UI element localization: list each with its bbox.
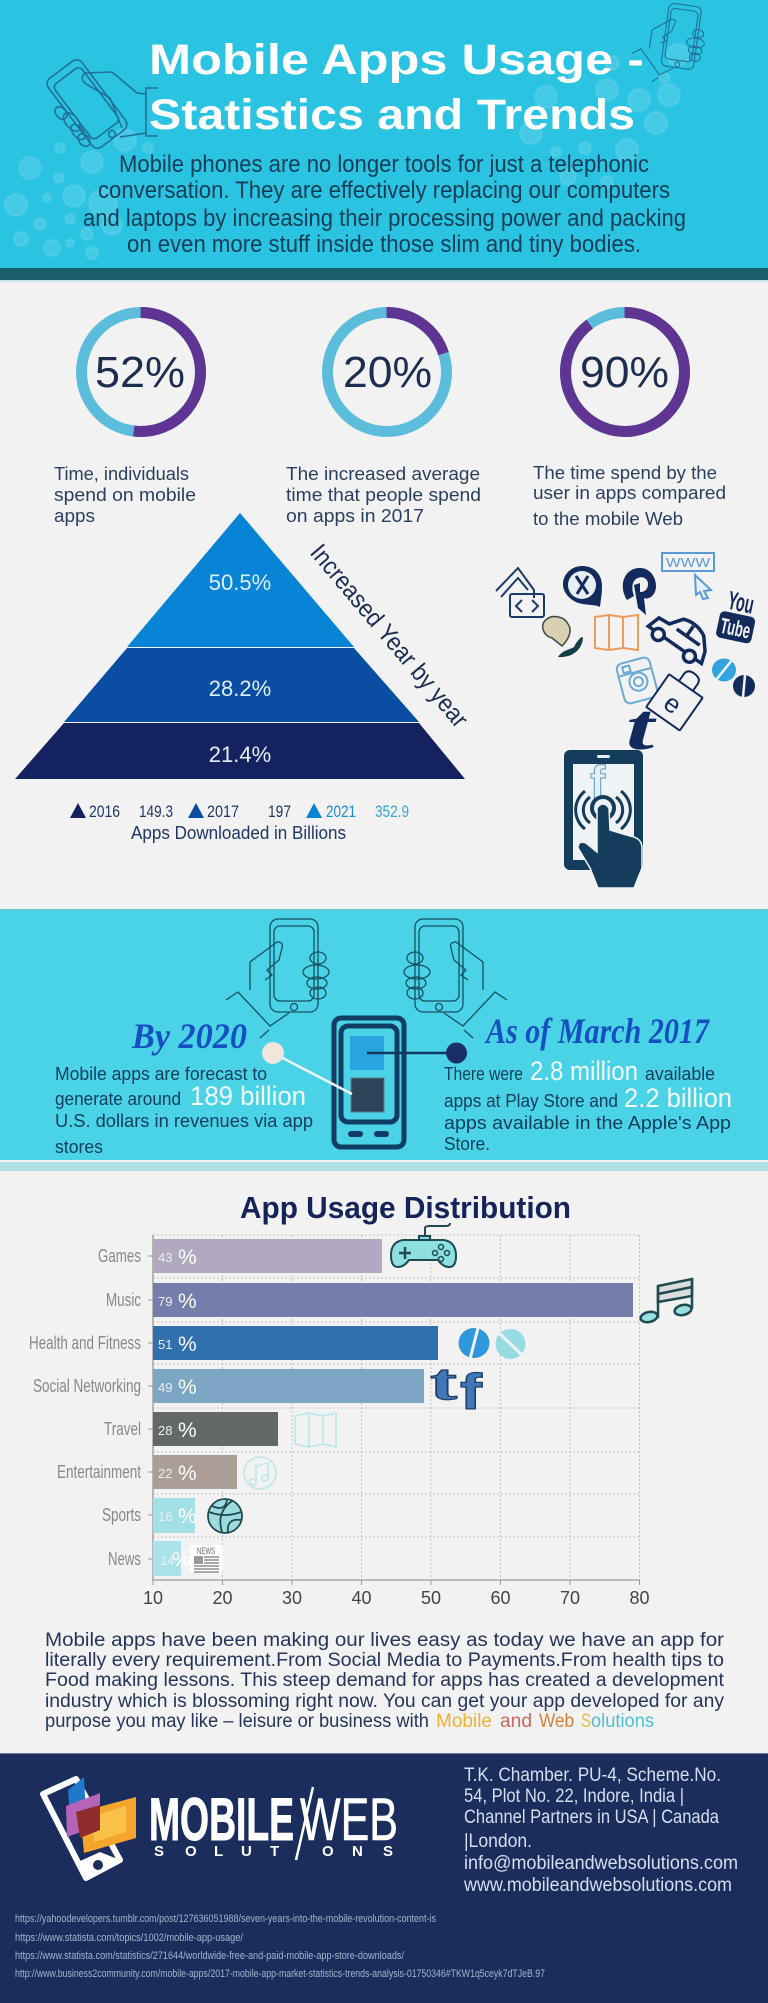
icon: e-shopping bag: e bbox=[658, 687, 687, 720]
heading: by 2020: By 2020 bbox=[131, 1016, 247, 1056]
text block: closing paragraph: S bbox=[581, 1711, 591, 1732]
icon: music notes bbox=[640, 1279, 692, 1324]
icon: chef hat and moustache bbox=[543, 617, 583, 657]
text: revenue forecast: 189 billion bbox=[190, 1081, 306, 1111]
icon: blue pill bbox=[712, 658, 736, 682]
text block: closing paragraph: Food making lessons. This steep demand for apps has created a development bbox=[45, 1670, 725, 1691]
bar: travel: 28 bbox=[158, 1423, 172, 1438]
icon: restaurant pin bbox=[563, 566, 602, 607]
icon: newspaper: NEWS bbox=[197, 1546, 215, 1556]
logo: mobile and web solutions: SOLUTONS bbox=[154, 1843, 393, 1860]
text: app store counts: Store. bbox=[444, 1134, 490, 1154]
bar: news: 14 bbox=[160, 1553, 174, 1568]
text block: closing paragraph bbox=[45, 1630, 725, 1732]
intro text: Mobile phones are no longer tools for just a telephonic bbox=[119, 151, 649, 178]
text block: closing paragraph: olutions bbox=[591, 1711, 654, 1732]
bar: news: % bbox=[172, 1548, 191, 1571]
x axis labels: 80 bbox=[629, 1588, 650, 1608]
icon: map bbox=[595, 615, 638, 650]
icon: music circle bbox=[244, 1457, 276, 1489]
icon: basketball bbox=[208, 1499, 242, 1533]
text: app store counts: apps available in the Apple's App bbox=[444, 1113, 731, 1133]
caption: 90%: to the mobile Web bbox=[533, 509, 683, 529]
icon: card bbox=[496, 568, 544, 617]
bar: games: % bbox=[178, 1246, 197, 1269]
text block: closing paragraph: purpose you may like – leisure or business with bbox=[45, 1711, 429, 1732]
x axis labels bbox=[143, 1588, 650, 1608]
icon: phone with tapping hand: f bbox=[590, 756, 606, 808]
panel: header bbox=[0, 0, 768, 282]
icon: phone with tapping hand bbox=[564, 750, 643, 888]
intro text: on even more stuff inside those slim and tiny bodies. bbox=[127, 231, 641, 258]
bar: travel: Travel bbox=[104, 1419, 141, 1439]
text: sources: https://www.statista.com/statistics/271644/worldwide-free-and-paid-mobile-app-store-downloads/ bbox=[15, 1950, 405, 1962]
caption: 20% bbox=[286, 464, 481, 526]
text: sources: http://www.business2community.com/mobile-apps/2017-mobile-app-market-statistics-trends-analysis-01750346#TKW1q5ceyk7dTJeB.97 bbox=[15, 1968, 545, 1980]
text: contact details: info@mobileandwebsolutions.com bbox=[464, 1853, 738, 1874]
bar: games bbox=[98, 1239, 382, 1273]
bar: social networking bbox=[33, 1369, 424, 1403]
chart: downloads pyramid: 28.2% bbox=[209, 676, 271, 701]
chart: downloads pyramid: 21.4% bbox=[209, 742, 271, 767]
text: sources bbox=[15, 1913, 545, 1980]
text: app store counts: available bbox=[645, 1064, 715, 1084]
heading: app usage distribution: App Usage Distribution bbox=[240, 1190, 571, 1225]
bar: social networking: 49 bbox=[158, 1380, 172, 1395]
legend: pyramid: 2017 bbox=[207, 802, 239, 821]
text: contact details: Channel Partners in USA | Canada bbox=[464, 1807, 719, 1828]
bar: sports: Sports bbox=[102, 1505, 141, 1525]
text block: closing paragraph: Mobile apps have been making our lives easy as today we have an app for bbox=[45, 1630, 725, 1651]
icon: pills bbox=[458, 1328, 526, 1359]
panel: forecasts bbox=[0, 909, 768, 1171]
text: app store counts bbox=[444, 1056, 732, 1154]
text block: closing paragraph: and bbox=[500, 1711, 532, 1732]
bar: entertainment: % bbox=[178, 1462, 197, 1485]
text block: closing paragraph: Mobile bbox=[436, 1711, 492, 1732]
bar: entertainment: Entertainment bbox=[57, 1462, 141, 1482]
bar: travel bbox=[104, 1412, 278, 1446]
icon: central phone with connectors bbox=[262, 1018, 467, 1147]
chart: donut 52%: 52% bbox=[95, 348, 185, 397]
title: Mobile Apps Usage - bbox=[149, 36, 644, 84]
icon: youtube bbox=[715, 584, 762, 644]
text: contact details: |London. bbox=[464, 1831, 532, 1852]
icon: tumblr and facebook: f bbox=[460, 1364, 482, 1420]
text: revenue forecast: Mobile apps are forecast to bbox=[55, 1064, 267, 1084]
text: app store counts: 2.2 billion bbox=[624, 1083, 732, 1113]
icon: car bbox=[644, 603, 718, 669]
icon: www window bbox=[662, 553, 714, 599]
caption: 52%: apps bbox=[54, 506, 95, 526]
text: sources: https://www.statista.com/topics/1002/mobile-app-usage/ bbox=[15, 1932, 244, 1944]
bar: travel: % bbox=[178, 1419, 197, 1442]
logo: mobile and web solutions: MOBILE bbox=[149, 1786, 294, 1853]
caption: 20%: time that people spend bbox=[286, 485, 481, 505]
icon: map bbox=[295, 1413, 336, 1447]
title bbox=[149, 36, 644, 139]
title: Statistics and Trends bbox=[149, 91, 635, 139]
chart: donut 52% bbox=[82, 312, 200, 432]
x axis labels: 20 bbox=[212, 1588, 233, 1608]
text: contact details: T.K. Chamber. PU-4, Scheme.No. bbox=[464, 1765, 721, 1786]
bar: entertainment: 22 bbox=[158, 1466, 172, 1481]
bar: health and fitness bbox=[29, 1326, 438, 1360]
text: sources: https://yahoodevelopers.tumblr.com/post/127636051988/seven-years-into-the-mobile-revolution-content-is bbox=[15, 1913, 436, 1925]
legend: pyramid: 2021 bbox=[326, 802, 356, 821]
x axis labels: 10 bbox=[143, 1588, 163, 1608]
x axis labels: 40 bbox=[351, 1588, 372, 1608]
bar: music: % bbox=[178, 1290, 197, 1313]
caption: 90%: The time spend by the bbox=[533, 463, 717, 483]
legend: pyramid: Apps Downloaded in Billions bbox=[131, 823, 346, 843]
logo: mobile and web solutions: WEB bbox=[300, 1786, 398, 1853]
caption: 20%: on apps in 2017 bbox=[286, 506, 424, 526]
heading: as of march 2017: As of March 2017 bbox=[484, 1011, 711, 1051]
chart: app usage bar chart bbox=[29, 1223, 692, 1608]
intro text: and laptops by increasing their processing power and packing bbox=[83, 205, 686, 232]
x axis labels: 30 bbox=[282, 1588, 302, 1608]
legend: pyramid: 352.9 bbox=[375, 802, 409, 821]
text: revenue forecast: generate around bbox=[55, 1089, 181, 1109]
icon: hand holding phone left bbox=[226, 919, 329, 1038]
bar: music: 79 bbox=[158, 1294, 172, 1309]
panel: footer bbox=[0, 1753, 768, 2003]
text: revenue forecast bbox=[55, 1064, 313, 1157]
bar: sports: 16 bbox=[158, 1509, 172, 1524]
text: contact details: 54, Plot No. 22, Indore, India | bbox=[464, 1786, 684, 1807]
panel: key statistics bbox=[54, 312, 726, 529]
intro text: conversation. They are effectively replacing our computers bbox=[98, 177, 670, 204]
chart: donut 20%: 20% bbox=[343, 348, 432, 397]
icon: pinterest bbox=[623, 568, 656, 615]
caption: 20%: The increased average bbox=[286, 464, 480, 484]
bar: sports bbox=[102, 1498, 197, 1533]
rotated label: increased year by year: Increased Year by year bbox=[304, 539, 474, 733]
bar: social networking: % bbox=[178, 1376, 197, 1399]
logo: mobile and web solutions bbox=[43, 1777, 398, 1878]
text: revenue forecast: stores bbox=[55, 1137, 103, 1157]
x axis labels: 50 bbox=[421, 1588, 441, 1608]
legend: pyramid: 149.3 bbox=[139, 802, 173, 821]
bar: entertainment bbox=[57, 1455, 237, 1489]
bar: health and fitness: 51 bbox=[158, 1337, 172, 1352]
text block: closing paragraph: literally every requirement.From Social Media to Payments.From health tips to bbox=[45, 1650, 724, 1671]
bar: news: News bbox=[108, 1549, 141, 1569]
text: contact details bbox=[463, 1765, 738, 1896]
icon: navy pill bbox=[733, 675, 755, 697]
caption: 52% bbox=[54, 464, 196, 526]
chart: donut 20% bbox=[328, 312, 446, 432]
x axis labels: 60 bbox=[490, 1588, 511, 1608]
icon: tumblr and facebook bbox=[430, 1354, 482, 1420]
text: contact details: www.mobileandwebsolutions.com bbox=[463, 1875, 732, 1896]
caption: 90%: user in apps compared bbox=[533, 483, 726, 503]
icon cluster: apps flying out of a phone bbox=[496, 553, 762, 888]
bar: news bbox=[108, 1541, 191, 1576]
text: app store counts: There were bbox=[444, 1064, 523, 1084]
chart: downloads pyramid: 50.5% bbox=[209, 570, 271, 595]
bar: music bbox=[106, 1283, 633, 1317]
chart: downloads pyramid bbox=[15, 513, 465, 779]
caption: 52%: spend on mobile bbox=[54, 485, 196, 505]
chart: donut 90%: 90% bbox=[580, 348, 669, 397]
text: revenue forecast: U.S. dollars in revenues via app bbox=[55, 1111, 313, 1131]
icon: tumblr and facebook: t bbox=[430, 1354, 458, 1411]
icon: newspaper bbox=[190, 1545, 223, 1573]
caption: 90% bbox=[533, 463, 726, 529]
bar: health and fitness: Health and Fitness bbox=[29, 1333, 141, 1353]
caption: 52%: Time, individuals bbox=[54, 464, 189, 484]
legend: pyramid: 197 bbox=[268, 802, 291, 821]
bar: music: Music bbox=[106, 1290, 141, 1310]
icon: game controller bbox=[391, 1223, 456, 1267]
icon: left hand holding phone bbox=[44, 57, 158, 151]
text: app store counts: apps at Play Store and bbox=[444, 1091, 618, 1111]
intro text bbox=[83, 151, 686, 258]
legend: pyramid bbox=[70, 802, 409, 843]
icon: www window: WWW bbox=[666, 555, 711, 570]
bar: sports: % bbox=[178, 1505, 197, 1528]
bar: health and fitness: % bbox=[178, 1333, 197, 1356]
text: app store counts: 2.8 million bbox=[530, 1056, 638, 1086]
x axis labels: 70 bbox=[560, 1588, 580, 1608]
chart: donut 90% bbox=[566, 312, 684, 432]
bar: games: Games bbox=[98, 1246, 141, 1266]
icon: tumblr: t bbox=[626, 691, 657, 764]
text block: closing paragraph: industry which is blossoming right now. You can get your app developed for any bbox=[45, 1691, 725, 1712]
bar: social networking: Social Networking bbox=[33, 1376, 141, 1396]
icon: e-shopping bag bbox=[646, 662, 711, 730]
icon: instagram bbox=[615, 656, 659, 705]
text block: closing paragraph: Web bbox=[539, 1711, 574, 1732]
legend: pyramid: 2016 bbox=[89, 802, 120, 821]
icon: right hand holding phone bbox=[629, 0, 709, 89]
bar: games: 43 bbox=[158, 1250, 172, 1265]
icon: hand holding phone right bbox=[404, 919, 507, 1038]
